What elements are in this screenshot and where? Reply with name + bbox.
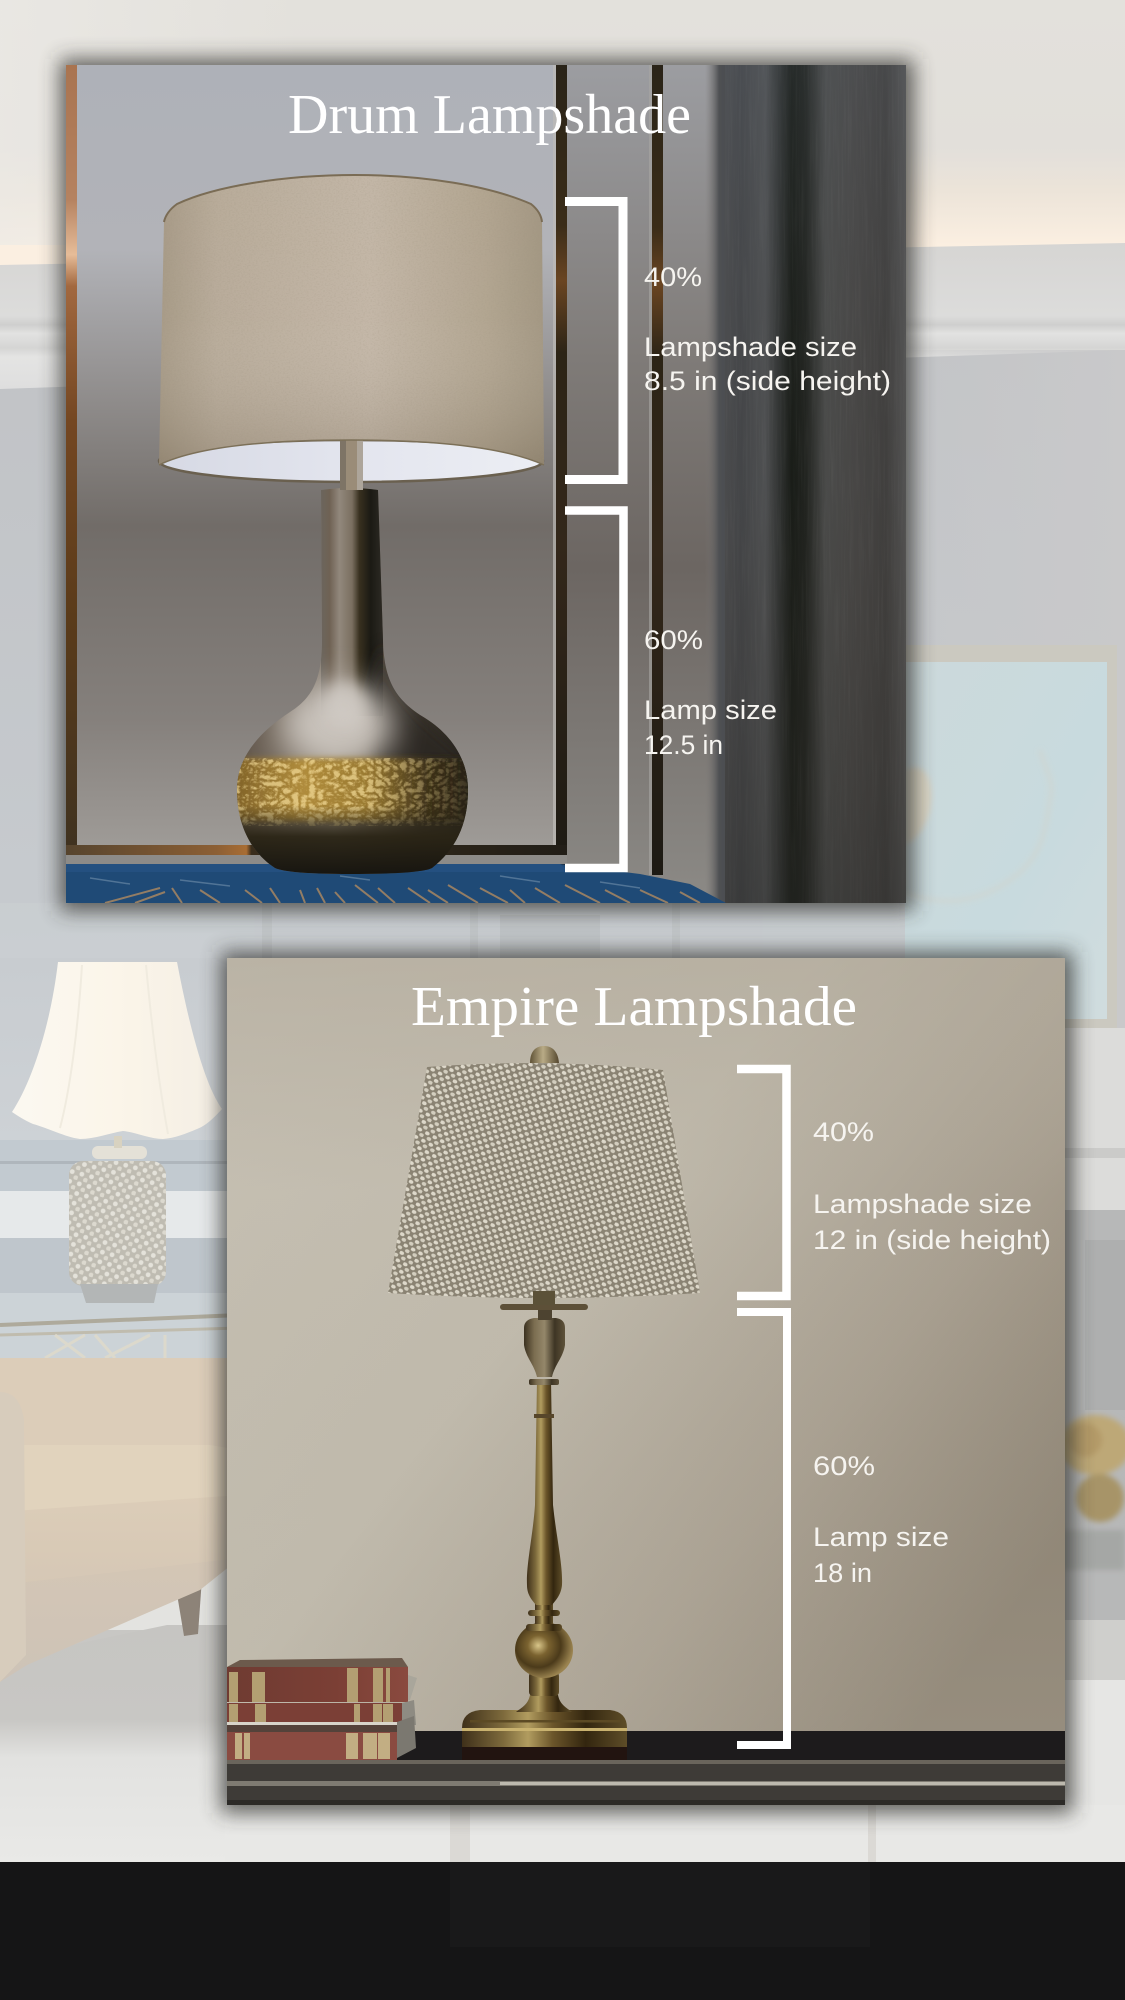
label: 40 percent lampshade size (813, 1117, 1051, 1255)
bracket: lampshade 40% (565, 202, 623, 480)
bracket: lamp 60% (737, 1312, 787, 1745)
label: 40 percent lampshade size: 12 in (side height) (813, 1225, 1051, 1255)
blue table (66, 864, 726, 903)
label: 60 percent lamp size: 60% (644, 625, 703, 655)
dark table (227, 1731, 1065, 1805)
background table lamp (12, 962, 222, 1303)
books (227, 1658, 417, 1760)
panel: empire lampshade (227, 958, 1065, 1805)
background floor (0, 1358, 240, 1862)
lamp: ceramic base with gold band (237, 488, 468, 874)
heading: Drum Lampshade: Drum Lampshade (288, 84, 691, 146)
background glass table (0, 1293, 240, 1358)
heading: Empire Lampshade: Empire Lampshade (411, 976, 857, 1038)
label: 40 percent lampshade size: Lampshade size (813, 1189, 1032, 1219)
curtain (705, 65, 906, 903)
label: 40 percent lampshade size (644, 262, 891, 396)
label: 60 percent lamp size (813, 1451, 949, 1588)
label: 60 percent lamp size: Lamp size (813, 1522, 949, 1552)
wall backdrop (77, 65, 718, 898)
label: 60 percent lamp size (644, 625, 777, 760)
bracket: lamp 60% (565, 510, 624, 868)
label: 40 percent lampshade size: Lampshade size (644, 332, 857, 362)
panel: drum lampshade (66, 65, 906, 903)
carpet strip under panels (225, 1805, 1125, 1862)
background flowers (1059, 1415, 1125, 1570)
empire lampshade (385, 1046, 705, 1305)
panel shadow: empire (221, 952, 1073, 1813)
label: 40 percent lampshade size: 40% (813, 1117, 874, 1147)
background sofa (0, 1358, 240, 1682)
bracket: lampshade 40% (737, 1069, 786, 1296)
label: 60 percent lamp size: 12.5 in (644, 730, 723, 760)
label: 60 percent lamp size: Lamp size (644, 695, 777, 725)
dark footer band (0, 1862, 1125, 2000)
background map picture (905, 645, 1117, 1029)
mantel detail between panels (0, 903, 905, 958)
label: 40 percent lampshade size: 40% (644, 262, 702, 292)
background molding left (0, 1140, 240, 1293)
wall backdrop (227, 958, 1065, 1738)
copper wall trim (66, 65, 663, 875)
lamp: brass candlestick base (462, 1291, 627, 1760)
drum lampshade (155, 170, 550, 490)
label: 60 percent lamp size: 18 in (813, 1558, 872, 1588)
label: 40 percent lampshade size: 8.5 in (side height) (644, 366, 891, 396)
panel shadow: drum (60, 59, 914, 911)
background mantel molding right (1060, 1028, 1125, 1620)
label: 60 percent lamp size: 60% (813, 1451, 875, 1481)
